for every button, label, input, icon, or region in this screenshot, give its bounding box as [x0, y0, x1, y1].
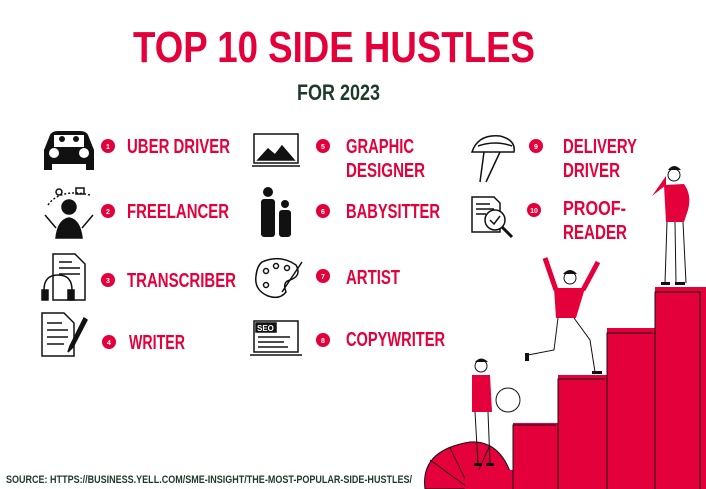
item 8: copywriter: 8 [321, 338, 325, 345]
item 5: graphic designer: GRAPHIC [346, 136, 414, 158]
icon: SEO laptop [250, 321, 302, 355]
item 6: babysitter: 6 [321, 209, 325, 216]
item 7: artist: ARTIST [346, 267, 400, 289]
item 9: delivery driver: DELIVERY [563, 136, 637, 158]
stairs [465, 287, 706, 489]
item 10: proofreader [472, 197, 627, 244]
person top [652, 166, 689, 285]
person jumping [525, 258, 602, 374]
icon: palette [256, 259, 302, 297]
source: SOURCE: HTTPS://BUSINESS.YELL.COM/SME-INSIGHT/THE-MOST-POPULAR-SIDE-HUSTLES/ [6, 474, 412, 486]
item 10: proofreader: READER [563, 222, 627, 244]
icon: juggling person [45, 188, 93, 238]
item 9: delivery driver [472, 136, 637, 182]
subtitle: FOR 2023 [297, 80, 380, 105]
item 2: freelancer: 2 [106, 209, 110, 216]
item 4: writer: WRITER [129, 332, 185, 354]
item 7: artist [256, 259, 400, 297]
illustration: staircase with people [425, 166, 706, 489]
person with bag [472, 358, 520, 466]
icon: monitor [252, 134, 300, 166]
item 9: delivery driver: DRIVER [563, 160, 620, 182]
item 4: writer: 4 [107, 340, 111, 347]
item 8: copywriter: COPYWRITER [346, 329, 445, 351]
icon: car [44, 131, 94, 170]
item 5: graphic designer [252, 134, 425, 182]
leaf [425, 442, 515, 489]
icon: helmet [472, 136, 514, 182]
item 2: freelancer: FREELANCER [127, 201, 229, 223]
title: TOP 10 SIDE HUSTLES [133, 23, 535, 72]
item 8: copywriter [250, 321, 445, 355]
item 9: delivery driver: 9 [534, 144, 538, 151]
item 6: babysitter [261, 187, 440, 237]
icon: magnifier document [472, 197, 512, 237]
item 10: proofreader: PROOF- [563, 198, 626, 220]
icon: headphones document [42, 254, 85, 300]
item 1: uber driver [44, 131, 230, 170]
item 4: writer [42, 313, 185, 356]
item 1: uber driver: UBER DRIVER [127, 136, 230, 158]
item 2: freelancer [45, 188, 229, 238]
item 6: babysitter: BABYSITTER [346, 201, 440, 223]
item 3: transcriber: TRANSCRIBER [127, 270, 236, 292]
item 5: graphic designer: DESIGNER [346, 160, 425, 182]
item 7: artist: 7 [321, 274, 325, 281]
icon: paper and pen [42, 313, 87, 356]
icon: SEO laptop: SEO [257, 324, 274, 333]
item 1: uber driver: 1 [106, 144, 110, 151]
item 3: transcriber: 3 [106, 278, 110, 285]
item 10: proofreader: 10 [530, 208, 538, 215]
icon: adult and child [261, 187, 291, 237]
item 3: transcriber [42, 254, 236, 300]
item 5: graphic designer: 5 [321, 144, 325, 151]
